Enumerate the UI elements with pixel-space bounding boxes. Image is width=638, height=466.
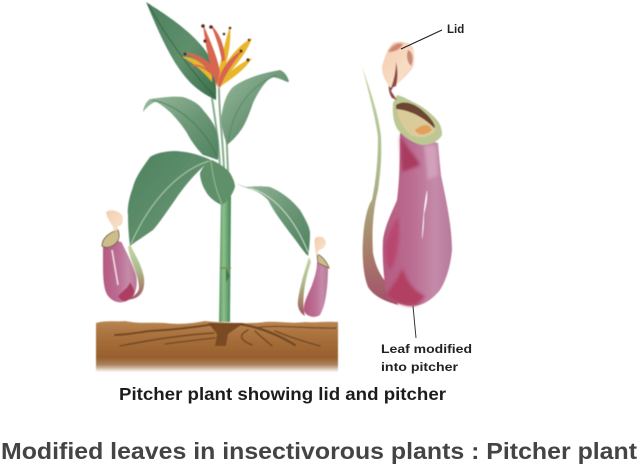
right lower leaf <box>236 183 310 256</box>
pitcher rim <box>393 95 442 145</box>
main stem <box>219 190 231 322</box>
large pitcher detail <box>362 42 452 306</box>
label: leaf modified into pitcher: Leaf modified <box>381 342 472 356</box>
flower stalks <box>212 88 228 172</box>
right small pitcher <box>298 237 329 317</box>
label: Lid <box>401 24 464 49</box>
neck <box>389 60 397 100</box>
soil with roots <box>96 321 338 372</box>
upper left leaf <box>143 97 219 160</box>
top leaf <box>146 2 216 100</box>
upper right leaf <box>221 70 289 145</box>
caption: Pitcher plant showing lid and pitcher <box>119 384 446 404</box>
left small pitcher <box>102 210 144 302</box>
roots <box>115 323 336 346</box>
title: Modified leaves in insectivorous plants : Pitcher plant <box>1 438 637 464</box>
pitcher watercolour shading <box>385 135 438 306</box>
flower <box>182 24 252 88</box>
label: leaf modified into pitcher: into pitcher <box>381 360 458 374</box>
label: Lid: Lid <box>447 24 464 36</box>
label: leaf modified into pitcher <box>381 306 472 374</box>
tendril <box>362 66 398 305</box>
pitcher body <box>383 133 452 306</box>
lid <box>382 42 414 88</box>
centre small leaf <box>200 160 235 205</box>
lower left leaf <box>128 151 211 246</box>
plant illustration <box>96 2 338 372</box>
